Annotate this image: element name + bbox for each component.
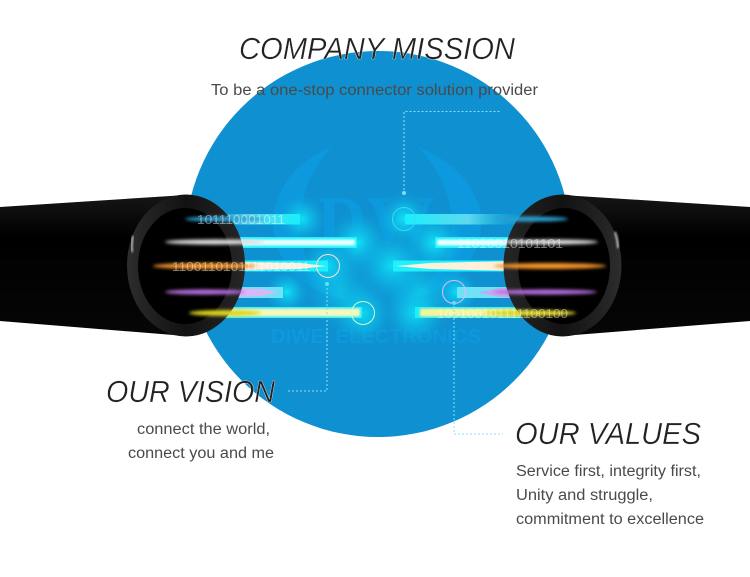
values text: Service first, integrity first, bbox=[516, 463, 701, 480]
vision text: connect the world, bbox=[137, 421, 270, 438]
right fibres glass bbox=[393, 214, 525, 318]
glow behind fibres bbox=[263, 189, 480, 347]
cable body bbox=[562, 195, 750, 336]
mission text: To be a one-stop connector solution provider bbox=[211, 82, 538, 99]
cable opening bbox=[518, 208, 610, 324]
watermark logo bbox=[271, 147, 481, 348]
heading: our vision: OUR VISION bbox=[106, 374, 276, 409]
cable ring bbox=[504, 194, 622, 336]
binary digits bbox=[172, 213, 568, 321]
watermark wings bbox=[273, 147, 481, 300]
ring markers bbox=[316, 208, 466, 324]
blue circle bbox=[185, 51, 571, 437]
connector line: values bbox=[452, 301, 503, 434]
heading: our values: OUR VALUES bbox=[515, 416, 701, 451]
left coloured light strands bbox=[153, 216, 265, 316]
cable body bbox=[0, 195, 186, 336]
ring highlight bbox=[132, 236, 133, 252]
binary digits: 100100101111100100 bbox=[437, 307, 568, 321]
watermark DW letters: DW bbox=[317, 182, 435, 258]
title: company mission: COMPANY MISSION bbox=[239, 31, 516, 66]
vision text bbox=[128, 421, 274, 462]
binary digits: 101110001011 bbox=[197, 213, 285, 227]
ring highlight bbox=[615, 232, 618, 248]
connector line: mission bbox=[402, 112, 500, 195]
values text: Unity and struggle, bbox=[516, 487, 653, 504]
values text bbox=[516, 463, 704, 528]
values text: commitment to excellence bbox=[516, 511, 704, 528]
vision text: connect you and me bbox=[128, 445, 274, 462]
left cable bbox=[0, 194, 245, 336]
binary digits: 11010010101101 bbox=[457, 237, 563, 251]
left fibres glass bbox=[205, 214, 362, 318]
binary digits: 1100110101111010011 bbox=[172, 260, 310, 274]
right cable bbox=[504, 194, 750, 336]
cable opening bbox=[138, 208, 232, 324]
right coloured light strands bbox=[484, 216, 606, 316]
watermark company name: DIWEI ELECTRONICS bbox=[271, 326, 481, 348]
cable ring bbox=[127, 194, 245, 336]
connector line: vision bbox=[287, 282, 329, 391]
